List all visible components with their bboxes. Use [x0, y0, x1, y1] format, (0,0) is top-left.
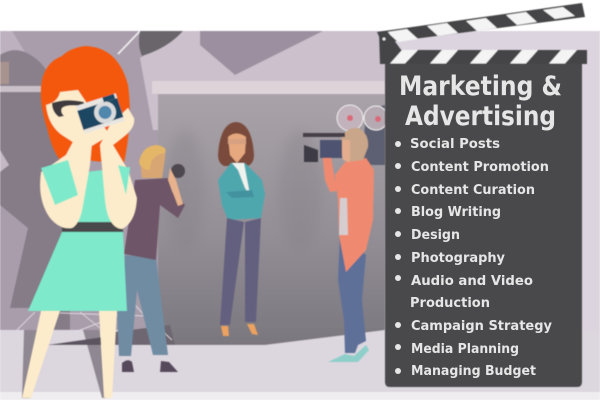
arm: [322, 150, 358, 192]
dress skirt: [28, 232, 127, 311]
left wall shadows: [0, 50, 106, 398]
list items: Photography: [411, 251, 506, 266]
list items: Managing Budget: [411, 364, 536, 379]
title: Marketing &: [399, 71, 562, 102]
cameraman: [303, 105, 388, 362]
list items: Production: [410, 296, 490, 311]
trousers: [220, 218, 261, 325]
jeans: [338, 233, 366, 353]
stripe band: [380, 50, 587, 64]
title: [399, 71, 562, 132]
dress shoulder panels: [41, 160, 130, 205]
list items: Social Posts: [410, 137, 500, 152]
list items: Audio and Video: [411, 274, 533, 289]
foreground woman with camera: [22, 46, 137, 398]
face: [228, 134, 246, 163]
list items: Content Promotion: [411, 160, 549, 175]
hair: [218, 122, 254, 166]
list items: Campaign Strategy: [411, 319, 553, 334]
face: [46, 90, 110, 150]
centre woman: [218, 122, 265, 336]
man shirt: [124, 178, 185, 260]
board panel: [385, 64, 582, 387]
belt: [62, 222, 123, 232]
floor crack lines: [17, 305, 172, 340]
shoes: [328, 345, 369, 362]
list items: Blog Writing: [411, 205, 501, 220]
clapper arm: [377, 3, 585, 43]
man trousers: [117, 255, 168, 356]
film projector reels: [337, 105, 388, 165]
title: Advertising: [405, 101, 556, 132]
salmon shirt: [335, 158, 374, 272]
list items: Media Planning: [411, 342, 519, 357]
list items: Design: [411, 228, 460, 243]
video camera: [303, 133, 345, 162]
camera: [76, 93, 125, 134]
feet: [221, 324, 258, 336]
list items: Content Curation: [411, 183, 535, 198]
backdrop top band: [152, 81, 385, 94]
clapperboard: [377, 3, 587, 387]
dress bodice: [60, 167, 130, 222]
studio light: [118, 31, 183, 56]
hair and head: [341, 128, 368, 162]
list items: [410, 137, 553, 379]
arms: [40, 108, 137, 229]
jacket: [218, 163, 265, 220]
shadows on backdrop: [165, 130, 322, 250]
backdrop: [158, 94, 385, 345]
glasses arm: [52, 100, 84, 117]
hinge: [379, 32, 410, 64]
photographer man: [117, 145, 185, 372]
man camera: [171, 164, 185, 178]
man head and hair: [140, 145, 165, 178]
hair: [41, 46, 130, 163]
bullets: [395, 141, 401, 374]
man shoes: [122, 360, 178, 372]
service list: [395, 137, 553, 379]
legs: [22, 311, 117, 398]
